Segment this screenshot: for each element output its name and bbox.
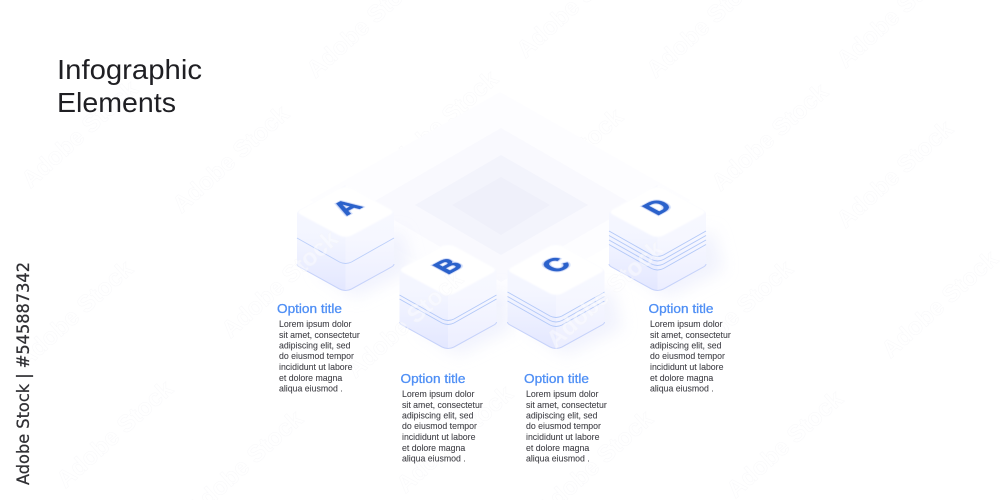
option D text xyxy=(648,301,731,394)
cube watermarks: Adobe Stock xyxy=(341,265,469,384)
option D body: do eiusmod tempor xyxy=(650,351,725,361)
cube watermarks: Adobe Stock xyxy=(541,235,669,354)
option B body: Lorem ipsum dolor xyxy=(402,389,475,399)
option C body: aliqua eiusmod . xyxy=(526,454,590,464)
cube B body xyxy=(400,243,496,349)
option B body xyxy=(402,389,483,464)
stock watermarks: Adobe Stock xyxy=(831,115,959,234)
cube D stripes xyxy=(609,231,706,270)
option A body: et dolore magna xyxy=(279,373,342,383)
letter D: D xyxy=(636,195,679,219)
option B body: do eiusmod tempor xyxy=(402,421,477,431)
stock watermarks: Adobe Stock xyxy=(376,65,504,184)
cube A stripe xyxy=(297,238,394,264)
option C body: do eiusmod tempor xyxy=(526,421,601,431)
stock watermarks: Adobe Stock xyxy=(876,245,1000,364)
cube D xyxy=(609,185,724,297)
option A body: Lorem ipsum dolor xyxy=(279,319,352,329)
option A body: sit amet, consectetur xyxy=(279,330,360,340)
stock id label: Adobe Stock | #545887342 xyxy=(14,262,33,485)
cube A body xyxy=(297,185,394,291)
cube watermarks xyxy=(216,225,799,500)
option A body: do eiusmod tempor xyxy=(279,351,354,361)
option B text xyxy=(400,371,483,464)
cube A xyxy=(297,185,412,297)
option B body: aliqua eiusmod . xyxy=(402,454,466,464)
cube watermarks: Adobe Stock xyxy=(216,225,344,344)
cube C xyxy=(508,243,622,355)
option D body: et dolore magna xyxy=(650,373,713,383)
title: Infographic xyxy=(57,54,202,85)
option A body xyxy=(279,319,360,394)
option D body xyxy=(650,319,731,394)
stock watermarks: Adobe Stock xyxy=(51,375,179,494)
option A title: Option title xyxy=(277,301,342,316)
cube C shadow xyxy=(526,288,622,355)
stock watermarks: Adobe Stock xyxy=(16,75,144,194)
cube C body xyxy=(508,243,604,349)
cube B stripes xyxy=(400,295,496,324)
option B body: et dolore magna xyxy=(402,443,465,453)
stock watermarks: Adobe Stock xyxy=(721,385,849,500)
stock watermarks: Adobe Stock xyxy=(501,103,629,222)
cube D body xyxy=(609,185,706,291)
cube watermarks: Adobe Stock xyxy=(391,380,519,499)
option C body: incididunt ut labore xyxy=(526,432,600,442)
option B body: sit amet, consectetur xyxy=(402,400,483,410)
option C text xyxy=(524,371,607,464)
option A body: aliqua eiusmod . xyxy=(279,384,343,394)
option C title: Option title xyxy=(524,371,589,386)
cube watermarks: Adobe Stock xyxy=(671,255,799,374)
option C body: sit amet, consectetur xyxy=(526,400,607,410)
title: Elements xyxy=(57,87,176,118)
option B body: incididunt ut labore xyxy=(402,432,476,442)
cube C stripes xyxy=(508,292,604,326)
option D body: aliqua eiusmod . xyxy=(650,384,714,394)
cube D shadow xyxy=(628,230,724,297)
option C body: Lorem ipsum dolor xyxy=(526,389,599,399)
cube A shadow xyxy=(316,230,412,297)
letter C: C xyxy=(534,253,578,277)
option C body xyxy=(526,389,607,464)
option D body: incididunt ut labore xyxy=(650,362,724,372)
option D title: Option title xyxy=(648,301,714,316)
option B title: Option title xyxy=(400,371,466,386)
option A text xyxy=(277,301,360,394)
stock watermarks: Adobe Stock xyxy=(706,78,834,197)
option D body: Lorem ipsum dolor xyxy=(650,319,723,329)
letter B: B xyxy=(426,254,470,278)
option C body: et dolore magna xyxy=(526,443,589,453)
cube B xyxy=(400,243,514,355)
option A body: adipiscing elit, sed xyxy=(279,340,351,350)
option D body: adipiscing elit, sed xyxy=(650,340,722,350)
stock watermarks: Adobe Stock xyxy=(11,255,139,374)
option B body: adipiscing elit, sed xyxy=(402,410,474,420)
option A body: incididunt ut labore xyxy=(279,362,353,372)
title xyxy=(57,54,202,118)
cube B shadow xyxy=(418,288,514,355)
option C body: adipiscing elit, sed xyxy=(526,410,598,420)
isometric base platform xyxy=(310,92,690,308)
option D body: sit amet, consectetur xyxy=(650,330,731,340)
stock watermarks: Adobe Stock xyxy=(167,100,295,219)
letter A: A xyxy=(325,195,369,219)
